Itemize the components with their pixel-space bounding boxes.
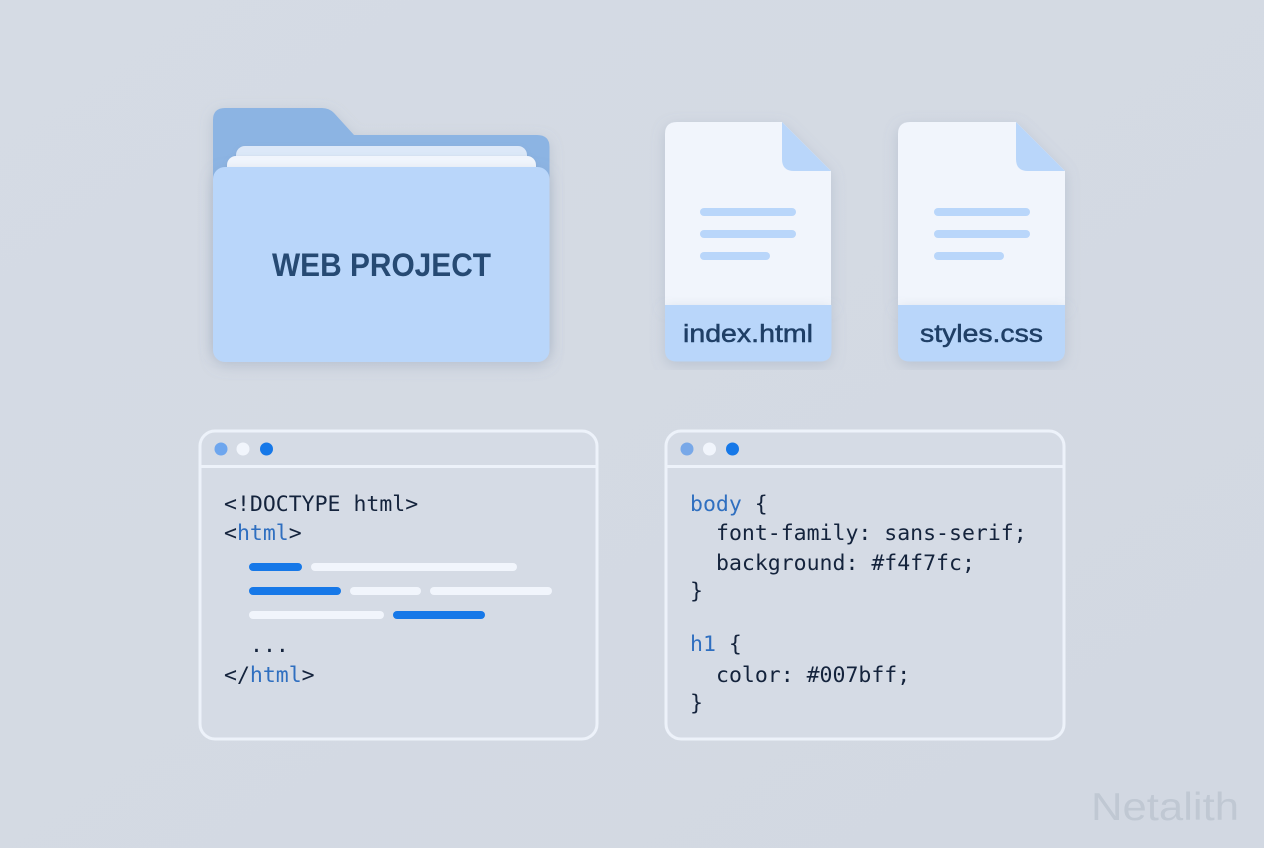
- css code: }: [690, 691, 703, 716]
- window frame: [200, 431, 597, 739]
- page body: [665, 122, 831, 305]
- css code: background: #f4f7fc;: [716, 551, 975, 576]
- filename band: [665, 305, 832, 362]
- folded corner: [1016, 122, 1065, 171]
- watermark: Netalith: [1091, 786, 1239, 829]
- file: styles.css: [898, 122, 1065, 362]
- css code: body {: [690, 492, 768, 517]
- css code: font-family: sans-serif;: [716, 521, 1027, 546]
- placeholder code bars: [249, 563, 552, 619]
- filename: index.html: [683, 320, 813, 348]
- window frame: [666, 431, 1064, 739]
- html code window: [200, 431, 597, 739]
- back paper sheet: [236, 146, 527, 176]
- css code window: [666, 431, 1064, 739]
- css code: h1 {: [690, 632, 742, 657]
- html code top: <html>: [224, 521, 302, 546]
- filename: styles.css: [920, 320, 1043, 348]
- folder: web project: [213, 108, 550, 362]
- html code top: <!DOCTYPE html>: [224, 492, 418, 517]
- folder label: WEB PROJECT: [272, 247, 491, 283]
- html code bottom: ...: [250, 633, 289, 658]
- html code bottom: </html>: [224, 663, 315, 688]
- folder back with tab: [213, 108, 550, 350]
- title bar divider: [201, 465, 596, 468]
- front paper sheet: [227, 156, 536, 186]
- folder front: [213, 167, 550, 362]
- content lines: [700, 208, 796, 260]
- file: index.html: [665, 122, 832, 362]
- css code: }: [690, 579, 703, 604]
- page body: [898, 122, 1065, 305]
- content lines: [934, 208, 1030, 260]
- filename band: [898, 305, 1065, 362]
- folded corner: [782, 122, 831, 171]
- css code: color: #007bff;: [716, 663, 910, 688]
- title bar divider: [667, 465, 1063, 468]
- window dots: [214, 442, 273, 456]
- window dots: [680, 442, 739, 456]
